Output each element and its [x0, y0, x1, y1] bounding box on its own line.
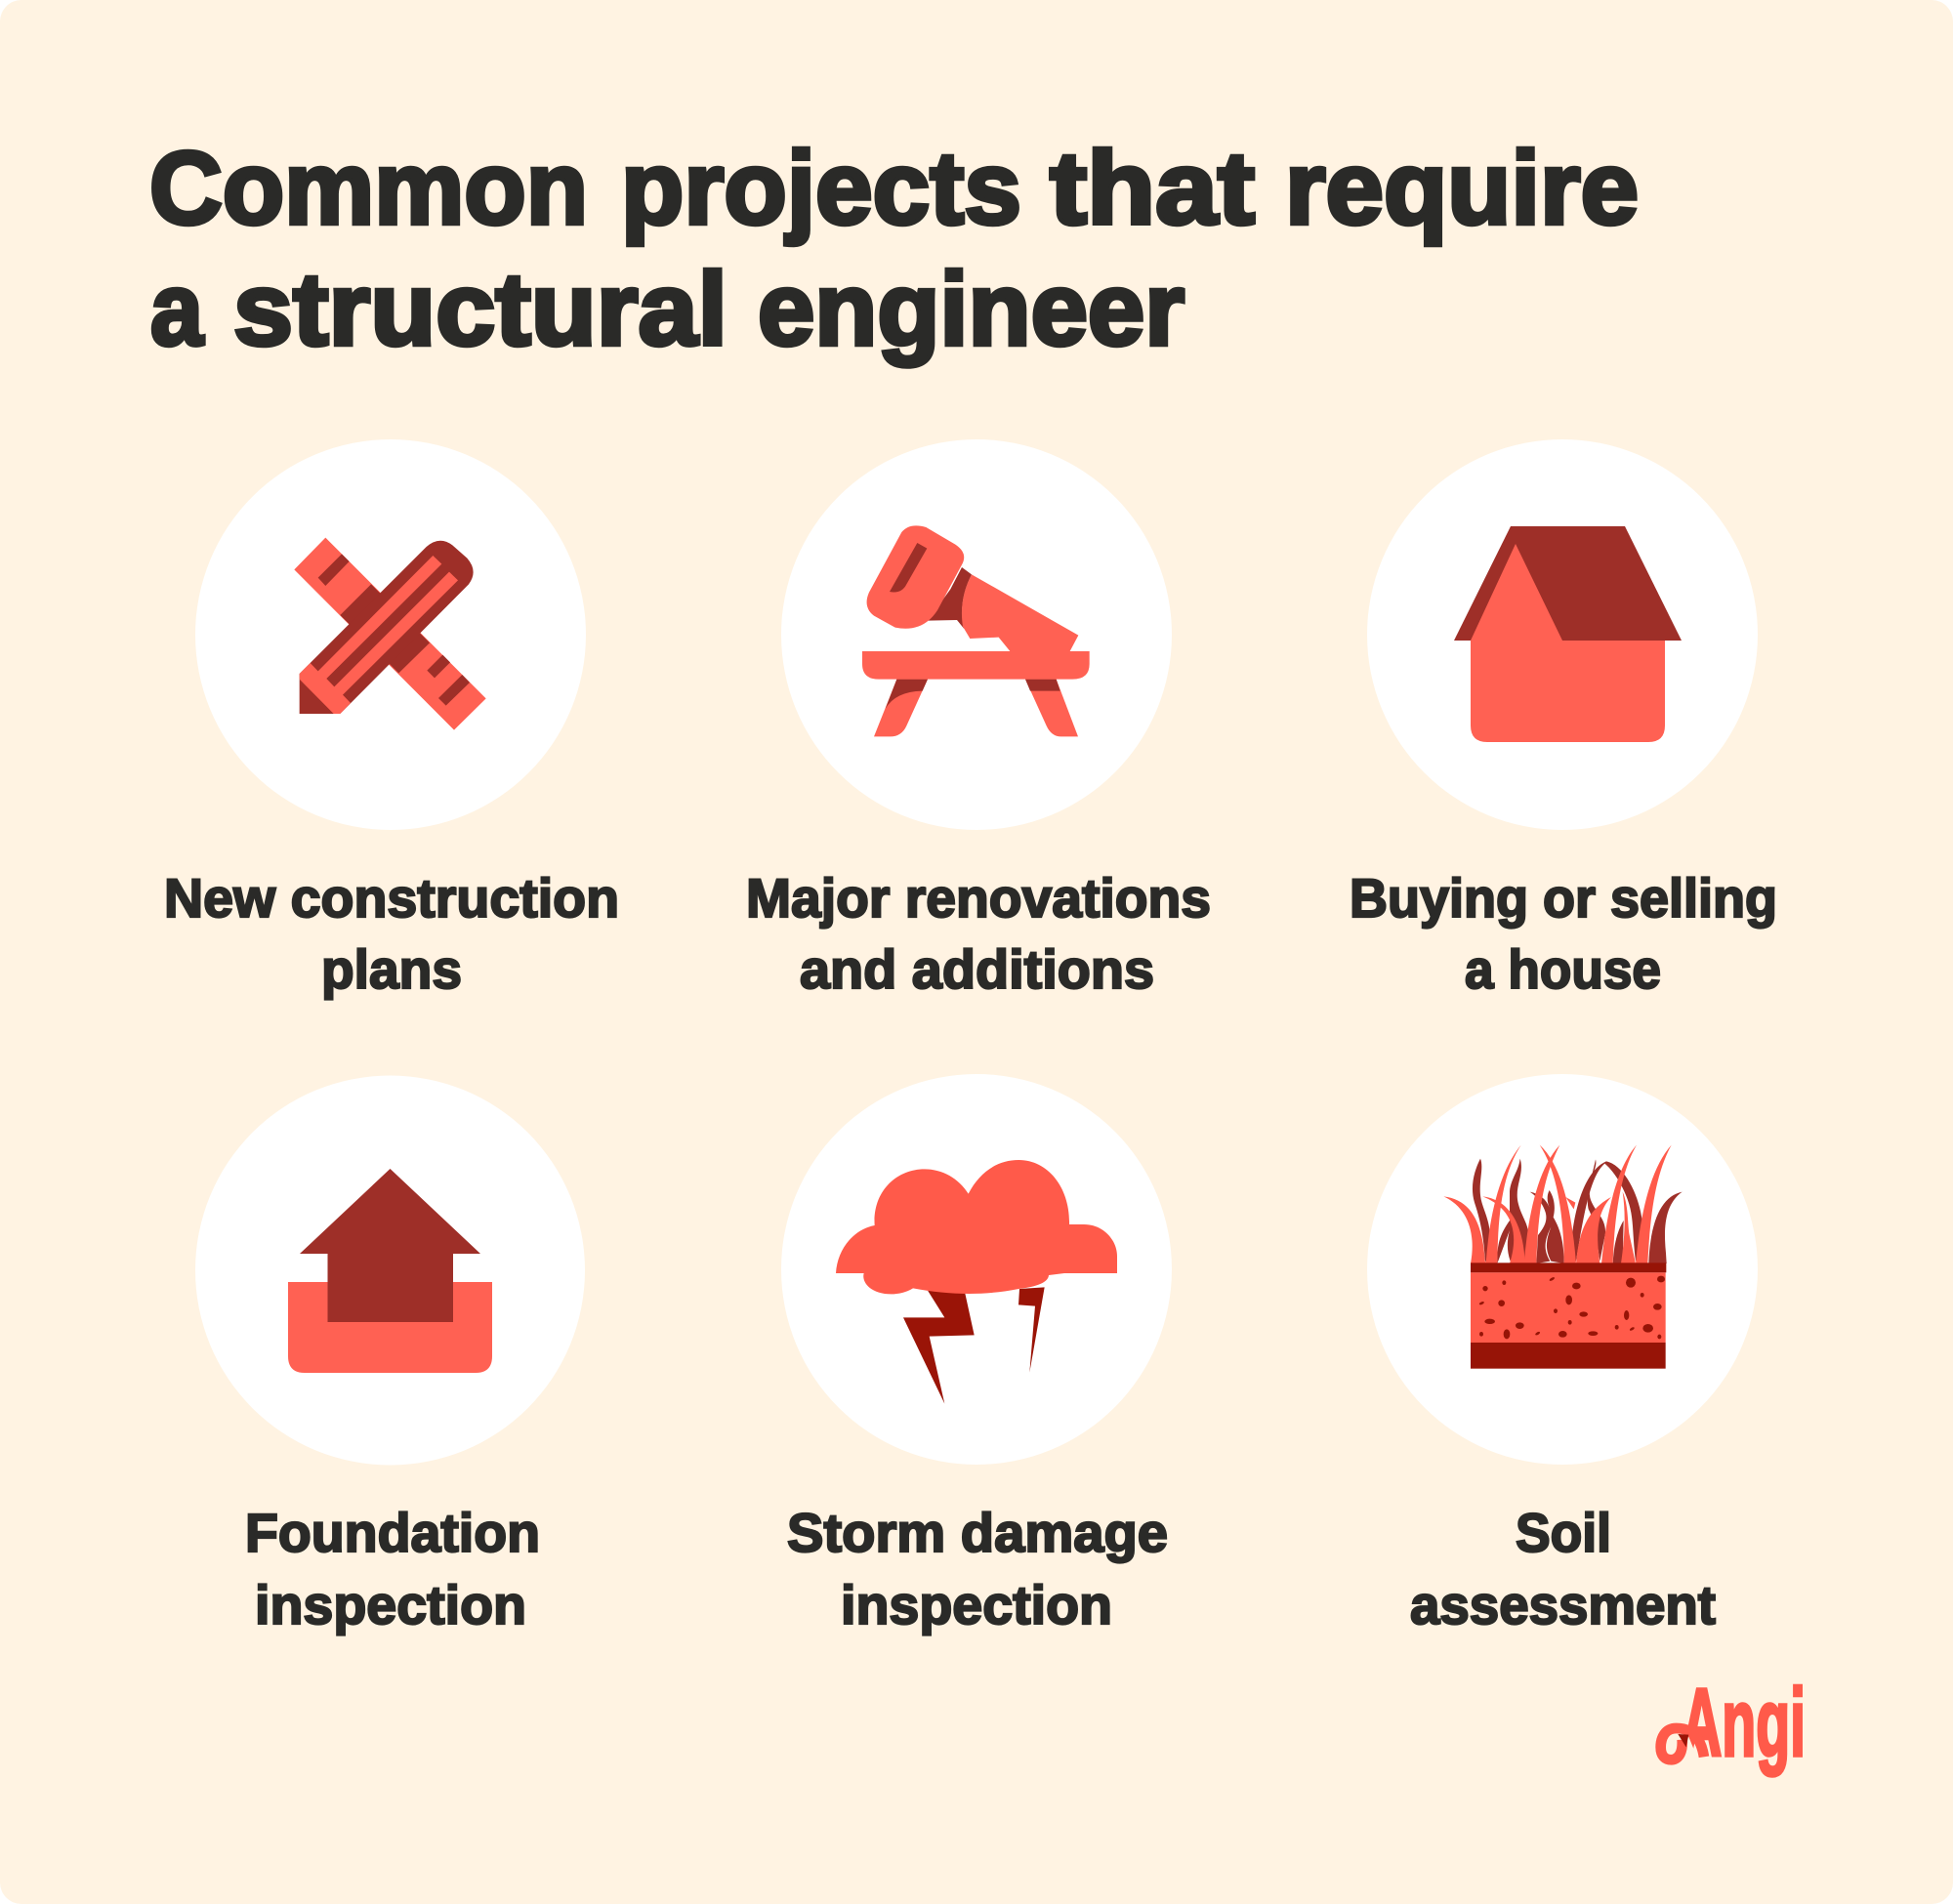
label: Storm damage: [787, 1502, 1168, 1563]
label: Soil: [1516, 1502, 1611, 1563]
title: engineer: [758, 252, 1184, 367]
icon: saw on sawhorse: [862, 525, 1090, 736]
title: require: [1285, 131, 1639, 246]
panel: storm damage inspection: [781, 1074, 1172, 1635]
label: [245, 1502, 540, 1635]
logo: Angi: Angi: [1682, 1669, 1806, 1776]
label: Foundation: [245, 1502, 540, 1563]
label: inspection: [841, 1574, 1112, 1635]
label: [1410, 1502, 1716, 1635]
icon: pencil and ruler: [294, 538, 486, 730]
panel: new construction plans: [164, 439, 619, 1000]
icon: soil and grass: [1443, 1145, 1683, 1369]
title: that: [1050, 131, 1255, 246]
title: projects: [621, 131, 1021, 246]
label: a house: [1465, 938, 1661, 1000]
label: assessment: [1410, 1574, 1716, 1635]
icon: house on foundation: [288, 1169, 492, 1373]
label: Buying or selling: [1350, 867, 1777, 929]
panel: foundation inspection: [195, 1076, 585, 1635]
title: [149, 131, 1639, 367]
logo: Angi: [1661, 1669, 1806, 1776]
title: structural: [233, 252, 727, 367]
icon: house: [1454, 526, 1682, 742]
label: plans: [321, 938, 462, 1000]
title: Common: [149, 131, 588, 246]
title: a: [150, 252, 204, 367]
panel: major renovations and additions: [746, 439, 1211, 1000]
label: [787, 1502, 1168, 1635]
label: [746, 867, 1211, 1000]
icon: storm cloud with lightning: [836, 1160, 1117, 1404]
panel: soil assessment: [1367, 1074, 1758, 1635]
label: Major renovations: [746, 867, 1211, 929]
label: inspection: [255, 1574, 526, 1635]
label: [164, 867, 619, 1000]
label: and additions: [800, 938, 1154, 1000]
label: [1350, 867, 1777, 1000]
label: New construction: [164, 867, 619, 929]
panel: buying or selling a house: [1350, 439, 1777, 1000]
